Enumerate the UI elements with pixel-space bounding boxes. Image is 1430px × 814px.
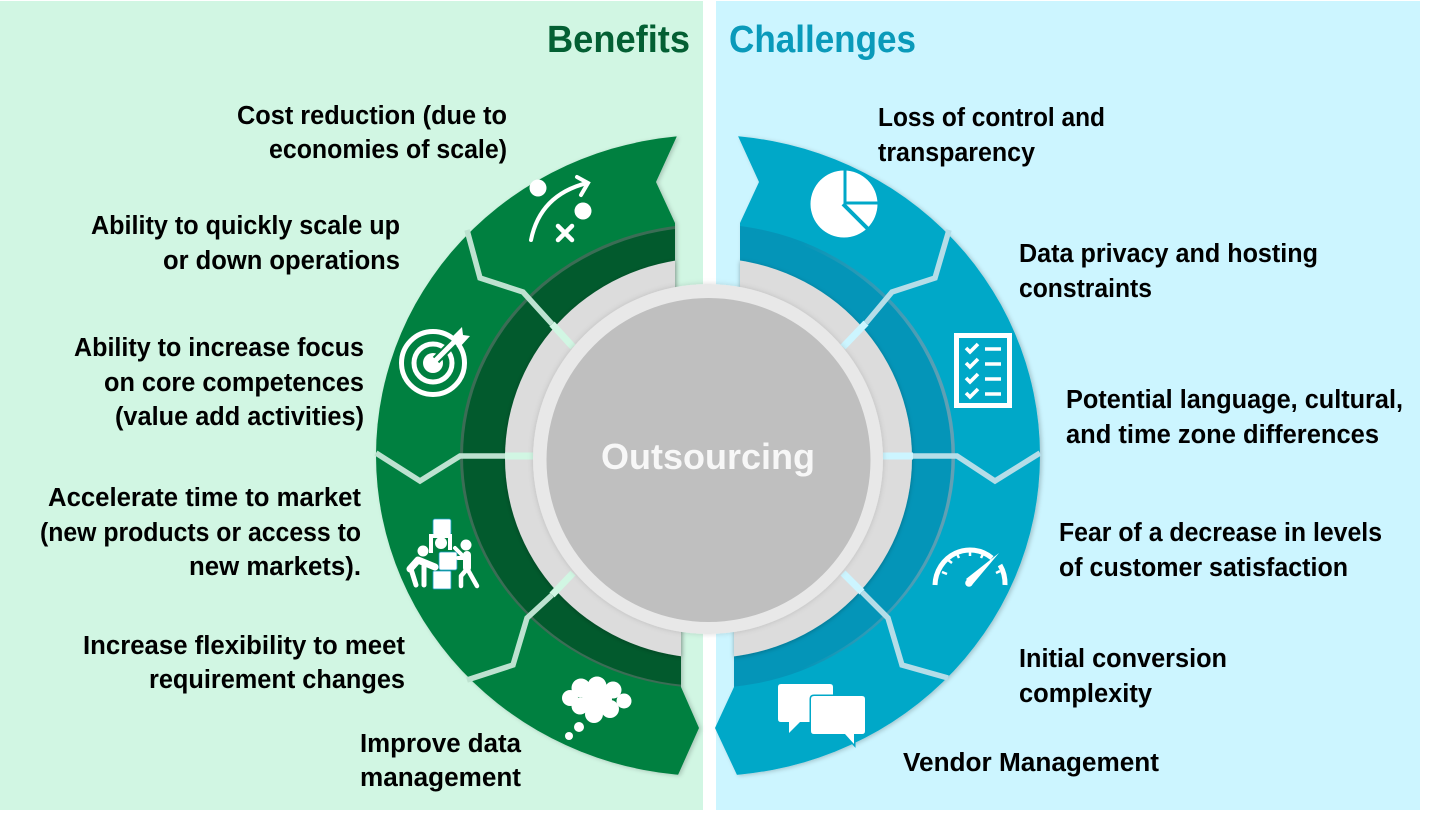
challenge: conversion complexity: complexity	[1019, 680, 1153, 708]
separator: right	[883, 453, 1040, 481]
benefit: time to market: new markets).	[189, 553, 361, 581]
separator: top right	[843, 230, 949, 347]
light ring	[533, 284, 883, 634]
benefit: flexibility	[83, 632, 406, 694]
separator: bottom right	[843, 573, 948, 678]
panel: benefits background	[0, 1, 703, 810]
separator: top left	[467, 230, 573, 347]
benefit: scale operations	[91, 212, 400, 275]
benefit: flexibility: Increase flexibility to meet	[83, 632, 406, 660]
benefit: time to market: Accelerate time to market	[48, 484, 362, 512]
benefit: flexibility: requirement changes	[149, 666, 405, 694]
dark green band	[460, 226, 681, 687]
benefit: cost reduction: economies of scale)	[269, 136, 507, 164]
benefit: core competences: (value add activities)	[115, 403, 364, 431]
benefit: data management: management	[360, 764, 522, 792]
challenge: customer satisfaction: of customer satisfaction	[1059, 554, 1348, 582]
heading: Benefits: Benefits	[547, 19, 690, 61]
icon: strategy play	[530, 177, 592, 240]
separator: left	[376, 453, 533, 481]
icon: pie chart	[810, 168, 880, 238]
icon: chat bubbles	[778, 684, 865, 744]
benefit: time to market: (new products or access to	[40, 519, 361, 547]
green outer segments	[376, 136, 702, 778]
benefit: data management: Improve data	[360, 730, 522, 758]
icon: speedometer	[935, 550, 1005, 587]
panel: benefits ring	[374, 136, 702, 778]
benefit: core competences	[74, 334, 364, 431]
icon: thought cloud	[562, 676, 632, 740]
panel: challenges background	[716, 1, 1420, 810]
challenge: language and culture	[1066, 386, 1403, 449]
separator: bottom left	[467, 573, 573, 680]
challenge: conversion complexity: Initial conversion	[1019, 645, 1227, 673]
challenge: loss of control: Loss of control and	[878, 104, 1105, 132]
benefit: scale operations: or down operations	[163, 247, 400, 275]
challenge: data privacy: constraints	[1019, 275, 1152, 303]
grey disc	[546, 298, 870, 622]
benefit: core competences: Ability to increase focus	[74, 334, 364, 362]
icon: target	[402, 327, 470, 394]
benefit: cost reduction	[237, 102, 507, 164]
center hub: Outsourcing	[533, 284, 883, 634]
benefit: core competences: on core competences	[104, 369, 364, 397]
icon: team stacking blocks	[410, 519, 477, 589]
blue outer segments	[715, 136, 1044, 778]
heading: Challenges: Challenges	[729, 19, 916, 61]
dark blue band	[734, 226, 955, 686]
challenge: conversion complexity	[1019, 645, 1227, 708]
challenge: loss of control: transparency	[878, 139, 1036, 167]
benefit: scale operations: Ability to quickly scale up	[91, 212, 400, 240]
challenge: customer satisfaction: Fear of a decrease in levels	[1059, 519, 1382, 547]
challenge: language and culture: and time zone differences	[1066, 421, 1379, 449]
challenge: customer satisfaction	[1059, 519, 1382, 582]
challenge: language and culture: Potential language, cultural,	[1066, 386, 1403, 414]
challenge: data privacy: Data privacy and hosting	[1019, 240, 1318, 268]
grey inner band	[504, 260, 684, 658]
panel: challenges ring	[715, 136, 1044, 778]
benefit: cost reduction: Cost reduction (due to	[237, 102, 507, 130]
challenge: loss of control	[878, 104, 1105, 167]
grey inner band	[732, 260, 914, 659]
challenge: data privacy	[1019, 240, 1318, 303]
icon: checklist	[956, 336, 1010, 406]
hub label: Outsourcing	[601, 436, 815, 477]
challenge: vendor management: Vendor Management	[903, 749, 1160, 777]
benefit: time to market	[40, 484, 362, 581]
benefit: data management	[360, 730, 522, 792]
